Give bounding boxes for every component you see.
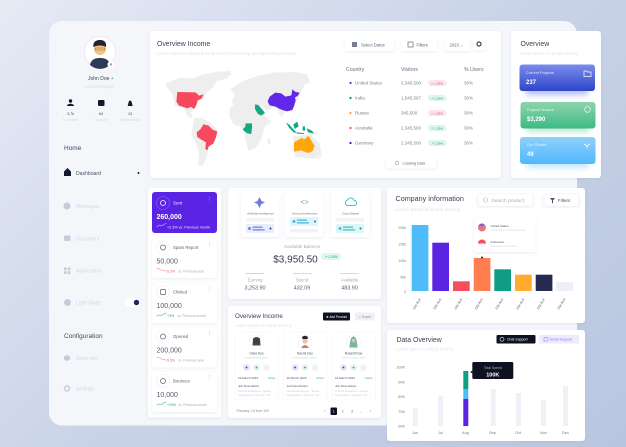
panel: overview cards: [511, 31, 601, 178]
card: our clients: 49: [527, 152, 534, 158]
button: filters: [401, 38, 437, 51]
y axis labels: 90K: [398, 380, 405, 384]
balance label: Available Balance: [284, 244, 321, 249]
button: add product: [323, 312, 350, 320]
button: select dates: [345, 38, 394, 51]
y axis labels: 60K: [398, 424, 405, 428]
map: Indonesia: [286, 122, 315, 134]
card: naomi doe: Job Description: [286, 384, 308, 388]
stat: earning: Earning: [248, 278, 263, 282]
row: Russia: Russia: [355, 110, 369, 116]
card: clicked: vs. Previous month: [177, 314, 206, 318]
card: naomi doe: Active: [316, 376, 324, 380]
card: strong architecture: <>: [300, 200, 309, 206]
card: spam report: 50,000: [156, 258, 178, 266]
columns: [413, 386, 568, 426]
stat: followers: Followers: [63, 118, 78, 122]
card: bounces: ⋮: [207, 375, 212, 381]
button: export: [355, 312, 375, 320]
balance change pill: ↗ 1.29%: [324, 255, 338, 259]
card: project finance: $3,290: [527, 117, 546, 123]
bar chart: [398, 225, 573, 310]
y axis labels: 200k: [398, 226, 406, 230]
table header: Country: [346, 67, 365, 73]
card: rusanti doe: 19 March 2023: [335, 376, 355, 380]
y axis labels: 50k: [400, 276, 406, 280]
button: filters: Filters: [416, 42, 428, 48]
map: Saudi Arabia: [255, 104, 265, 116]
card: current projects: 237: [526, 80, 537, 86]
panel: sidebar: [63, 36, 140, 392]
stat: earning: [245, 273, 265, 292]
card: strong architecture: Strong Architecture: [292, 212, 318, 216]
row: India: 30%: [464, 96, 473, 100]
card: clicked: +3%: [167, 314, 174, 318]
card: rusanti doe: Lorem Ipsum dolor: [342, 356, 365, 360]
subheading: Lorem Ipsum is simply dummy text of the printing and typesetting industry: [157, 51, 298, 56]
heading: Company information: [396, 194, 464, 203]
card: current projects: Current Projects: [526, 70, 554, 75]
subheading: Lorem Ipsum is simply dummy: [396, 207, 461, 213]
heading: Overview Income: [235, 313, 283, 320]
card: spam report: vs. Previous year: [178, 270, 205, 274]
heading: configuration: Configuration: [64, 333, 103, 340]
x axis labels: [412, 298, 566, 310]
pagination: 3: [351, 409, 353, 413]
stat: available: Available: [341, 278, 359, 282]
stat: images: [95, 100, 107, 122]
balance value: $3,950.50: [273, 254, 318, 266]
row: India: [349, 95, 473, 101]
map: DR Congo: [243, 123, 252, 134]
x axis labels: Ole Ave: [495, 298, 504, 310]
row: India: ↗ 1.29%: [431, 96, 443, 100]
row: Germany: ↗ 1.29%: [431, 141, 443, 145]
row: India: India: [355, 96, 365, 100]
row: United States: [349, 80, 473, 86]
stat: earning: 3,253.90: [245, 286, 265, 292]
tooltip: countries: Indonesia: [490, 240, 504, 244]
map: United States: [176, 92, 204, 109]
card: clara doe: 19 March 2023: [238, 376, 258, 380]
button: email support: Email Support: [550, 338, 572, 342]
card: clara doe: Clara Doe: [249, 352, 264, 356]
button: loading data: [385, 158, 437, 168]
pagination: ‹: [324, 409, 326, 413]
card: spam report: Spam Report: [173, 245, 199, 250]
nav: settings: [64, 386, 95, 392]
y axis labels: 0: [404, 290, 406, 294]
stat: notifications: Notifications: [120, 118, 140, 122]
card: clara doe: Current Employee - Senior: [238, 389, 271, 393]
panel: data overview: [387, 330, 585, 441]
card: cloud based: [331, 193, 370, 237]
card: bounces: [152, 372, 217, 412]
table: countries: [346, 67, 484, 146]
stat: images: 64: [99, 112, 103, 116]
x axis labels: Jun: [412, 430, 418, 435]
card: rusanti doe: [332, 332, 376, 400]
card: sent: Sent: [173, 200, 183, 206]
balance change pill: [321, 253, 341, 260]
card: spam report: ⋮: [207, 241, 212, 247]
row: Russia: ↙ 1.29%: [431, 111, 443, 115]
card: sent: 260,000: [156, 214, 182, 221]
card: project finance: [520, 102, 596, 132]
map: Australia: [294, 136, 315, 153]
card: naomi doe: Consultant in Servers / IO: [286, 393, 319, 397]
card: artificial intelligence: [241, 193, 280, 237]
card: clara doe: Job Description: [238, 384, 260, 388]
row: Germany: 2,345,500: [401, 140, 422, 146]
tooltip: total spend: Total Spend: [484, 366, 502, 370]
search box: Search product: [492, 198, 525, 204]
card: sent: +2.3% vs. Previous month: [167, 226, 210, 230]
card: rusanti doe: Active: [365, 376, 373, 380]
x axis labels: Aug: [462, 430, 469, 435]
subheading: Lorem Ipsum is simply dummy: [235, 323, 292, 328]
pagination: [324, 408, 371, 415]
card: bounces: Bounces: [173, 378, 190, 384]
y axis labels: [396, 366, 405, 428]
card: naomi doe: Current Employee - Senior: [286, 389, 320, 393]
row: Australia: ↗ 1.29%: [431, 126, 443, 130]
y axis labels: 100K: [396, 366, 405, 370]
nav: light mode toggle: [64, 298, 140, 307]
button: export: ▷ Export: [359, 315, 371, 319]
card: opened: 5.3%: [167, 358, 175, 362]
panel: team overview income: [228, 306, 381, 418]
x axis labels: Jul: [438, 430, 443, 435]
nav: dashboard: [64, 168, 140, 177]
world map: [166, 71, 322, 166]
row: Australia: 2,345,500: [401, 126, 422, 130]
card: naomi doe: 19 March 2023: [286, 376, 307, 380]
pagination: ...: [360, 409, 362, 413]
card: clara doe: [235, 332, 278, 400]
card: bounces: +10%: [167, 403, 176, 407]
card: spam report: [152, 238, 217, 278]
row: United States: ↙ 1.29%: [431, 81, 443, 85]
x axis labels: Dec: [562, 430, 569, 435]
row: Russia: [349, 110, 473, 116]
card: rusanti doe: Job Description: [335, 384, 357, 388]
card: naomi doe: Naomi Doe: [297, 352, 313, 356]
card: spam report: 5.3%: [167, 270, 175, 274]
tooltip: total spend: [470, 362, 513, 379]
heading: home: Home: [64, 145, 82, 152]
x axis labels: Ole Ave: [557, 298, 566, 310]
button: chat support: Chat Support: [507, 338, 528, 342]
row: United States: 2,345,500: [401, 80, 422, 86]
card: naomi doe: Lorem Ipsum dolor: [293, 356, 317, 360]
card: opened: Opened: [173, 334, 189, 339]
nav: messages: [64, 202, 100, 210]
subheading: Lorem Ipsum is simply dummy: [396, 346, 455, 352]
button: settings: [473, 38, 485, 50]
pagination: 1: [333, 409, 335, 413]
card: current projects: [520, 64, 595, 95]
user name: John Doe +: [88, 76, 114, 82]
row: India: 1,545,567: [401, 96, 422, 100]
card: our clients: [520, 137, 596, 168]
subheading: Lorem Ipsum is simply dummy: [520, 51, 579, 56]
pagination: 2: [342, 409, 344, 413]
map: Brazil: [197, 124, 217, 150]
row: Germany: 30%: [464, 140, 473, 146]
card: rusanti doe: Rusanti Doe: [345, 352, 362, 356]
nav: application: [64, 268, 101, 274]
tooltip: countries: United States: [490, 224, 509, 228]
row: Australia: Australia: [355, 126, 373, 130]
card: clicked: 100,000: [156, 303, 182, 310]
nav: light mode toggle: Light Mode: [76, 300, 101, 306]
x axis labels: Ole Ave: [536, 298, 546, 310]
table header: [346, 67, 484, 73]
card: rusanti doe: Current Employee - Senior: [335, 389, 368, 393]
row: Russia: 345,500: [401, 110, 418, 116]
x axis labels: Ole Ave: [454, 298, 463, 310]
panel: company information: [387, 188, 585, 323]
stat: spend: [293, 273, 312, 292]
x axis labels: Ole Ave: [516, 298, 525, 310]
button: add product: ✚ Add Product: [326, 315, 347, 319]
nav: application: Application: [76, 268, 101, 274]
search box: [478, 194, 533, 206]
heading: Data Overview: [396, 337, 442, 344]
nav: document: Document: [76, 236, 100, 242]
card: clara doe: Active: [268, 376, 276, 380]
card: bounces: vs. Previous month: [178, 403, 207, 407]
card: opened: [152, 328, 217, 368]
y axis labels: 70K: [398, 410, 405, 414]
card: clicked: [152, 283, 217, 323]
x axis labels: Sep: [489, 430, 496, 435]
map: China: [268, 89, 300, 111]
card: sent: [152, 192, 217, 233]
stat: followers: 3.7k: [67, 112, 74, 116]
panel: overview income map and table: [150, 31, 501, 178]
card: our clients: Our Clients: [527, 142, 547, 147]
stat: notifications: [120, 100, 140, 122]
tooltip: countries: Paragraph text content: [490, 244, 517, 248]
row: Russia: 30%: [464, 110, 473, 116]
row: Australia: [349, 125, 473, 131]
row: Germany: [349, 140, 473, 146]
card: strong architecture: [285, 193, 324, 237]
pagination: ›: [370, 409, 371, 413]
row: United States: 30%: [464, 80, 473, 86]
button: filters: [544, 194, 579, 206]
x axis labels: [412, 430, 569, 435]
card: clicked: Clicked: [173, 290, 188, 294]
x axis labels: Ole Ave: [433, 298, 442, 310]
dropdown: year: 2023 ⌄: [450, 42, 464, 48]
stat: spend: Spend: [296, 278, 309, 282]
nav: messages: Messages: [76, 204, 100, 210]
heading: Overview: [520, 41, 549, 48]
card: naomi doe: [284, 332, 327, 400]
card: clara doe: Consultant in Servers / IO: [238, 393, 271, 397]
nav: stack dev: [64, 355, 99, 362]
tooltip: countries: Lorem Ipsum is simply dummy: [490, 228, 526, 232]
highlighted column: August: [463, 371, 468, 426]
x axis labels: Ole Ave: [412, 298, 422, 310]
card: artificial intelligence: Artificial Intelligence: [247, 212, 274, 216]
button: filters: Filters: [558, 198, 571, 203]
row: United States: United States: [355, 80, 383, 86]
card: sent: ⋮: [207, 197, 212, 203]
stat: available: 483.90: [341, 286, 358, 292]
x axis labels: Nov: [540, 430, 547, 435]
card: cloud based: Cloud Based: [342, 212, 359, 216]
nav: stack dev: Stack dev: [76, 356, 99, 362]
y axis labels: 80K: [398, 395, 405, 399]
stat: followers: [63, 99, 78, 122]
main panel background: [49, 21, 577, 426]
stat: spend: 432.09: [294, 286, 310, 292]
y axis labels: 150k: [398, 242, 406, 246]
role: UI/UX Designer: [84, 84, 114, 89]
y axis labels: [398, 226, 406, 294]
row: Germany: Germany: [355, 140, 374, 146]
card: project finance: Project Finance: [527, 107, 554, 112]
card: opened: vs. Previous year: [178, 358, 205, 362]
column chart: [396, 362, 569, 435]
card: rusanti doe: Consultant in Servers / IO: [335, 393, 368, 397]
bars: [412, 225, 573, 291]
card: bounces: 10,000: [156, 392, 178, 399]
nav: document: [64, 236, 100, 242]
dropdown: year: [445, 38, 470, 51]
y axis labels: 100k: [398, 259, 406, 263]
stat: notifications: 13: [128, 112, 132, 116]
button: select dates: Select Dates: [361, 42, 385, 48]
pagination summary: Showing 1-8 from 100: [236, 409, 269, 413]
panel: available balance: [228, 188, 381, 299]
nav: settings: Settings: [76, 386, 95, 392]
button: chat support: [496, 335, 536, 344]
panel: email stats column: [148, 188, 221, 418]
button: loading data: Loading Data: [402, 162, 426, 166]
card: clara doe: Lorem Ipsum dolor: [245, 356, 268, 360]
stat: images: Images: [95, 118, 107, 122]
icon: user avatar: [84, 36, 116, 69]
button: email support: [539, 335, 579, 344]
table header: Visitors: [401, 67, 418, 73]
table header: % Users: [464, 67, 484, 73]
x axis labels: Ole Ave: [474, 298, 484, 310]
stat: available: [340, 273, 359, 292]
card: clicked: ⋮: [207, 286, 212, 292]
row: Australia: 30%: [464, 126, 473, 130]
x axis labels: Oct: [515, 430, 522, 435]
tooltip: countries: [474, 219, 536, 258]
nav: dashboard: Dashboard: [76, 171, 101, 177]
heading: Overview Income: [157, 41, 210, 48]
tooltip: total spend: 100K: [486, 372, 499, 378]
card: opened: 200,000: [156, 348, 182, 354]
card: opened: ⋮: [207, 330, 212, 336]
